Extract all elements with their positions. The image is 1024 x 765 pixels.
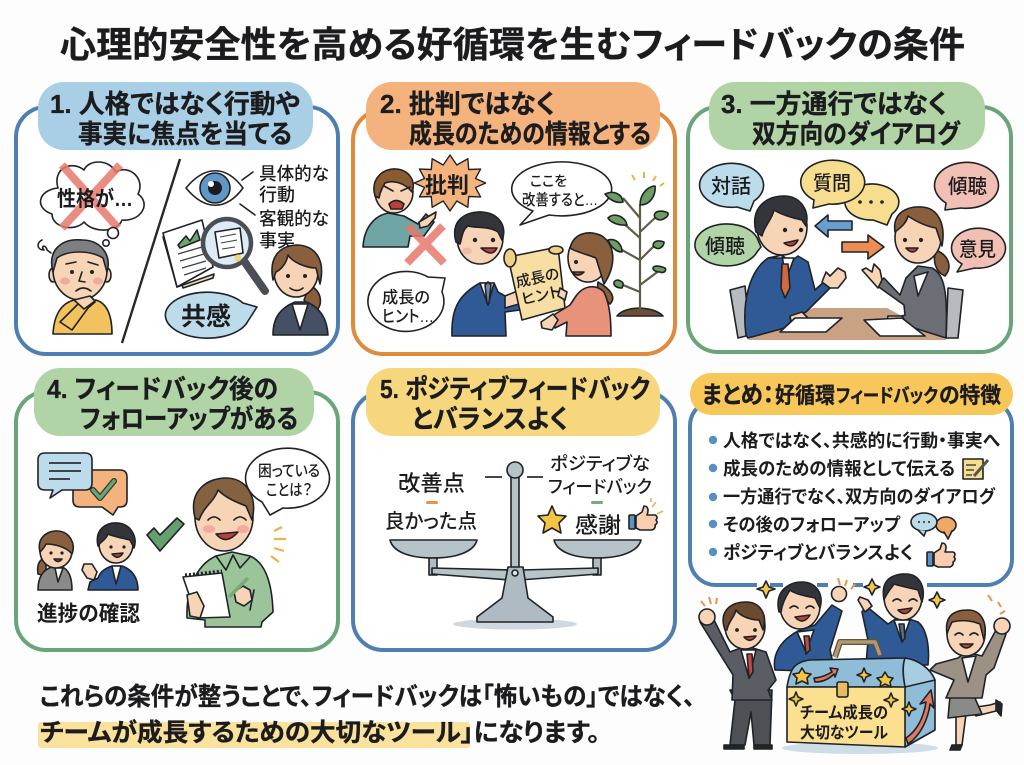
heading 5: とバランスよく (412, 404, 568, 434)
speech bubble: anything troubling (246, 448, 330, 515)
sparkles (757, 579, 945, 608)
worried older man (38, 240, 112, 334)
panel 3: two-way dialogue (688, 82, 1011, 352)
heading 1: 1. 人格ではなく行動や (50, 89, 300, 119)
angry critic (363, 169, 436, 247)
chest decorations (789, 668, 916, 716)
heading 4: 4. フィードバック後の (47, 374, 278, 404)
icon: note (963, 459, 988, 479)
balance labels right: 感謝 (575, 513, 621, 538)
woman in taupe suit (930, 610, 1010, 750)
panel 4: follow-up (16, 368, 338, 650)
divider slash (122, 159, 180, 343)
speech bubble: anything troubling: ことは？ (266, 482, 312, 499)
heading 5: 5. ポジティブフィードバック (380, 374, 650, 404)
arrow: blue pointing left (815, 215, 852, 237)
panel 5: positive balance (353, 368, 675, 650)
label: progress check: 進捗の確認 (37, 602, 140, 626)
balance labels left: 改善点 (398, 471, 465, 496)
smiling man with notepad (183, 478, 273, 627)
plant (605, 172, 668, 316)
bubble: opinion (951, 228, 1005, 272)
speech bubble: growth hint (368, 271, 445, 331)
thought cloud: personality crossed out (41, 162, 144, 246)
closing message: チームが成長するための大切なツール」になります。 (40, 718, 600, 747)
bubble: ellipsis (845, 184, 899, 225)
papers on table (780, 318, 925, 336)
labels: concrete behaviour, objective facts (259, 164, 329, 251)
icon: eye (186, 171, 255, 215)
blue chat bubble with lines (38, 453, 92, 498)
heading 3 (709, 82, 985, 150)
heading 3: 3. 一方通行ではなく (721, 89, 947, 119)
thought cloud: personality crossed out: 性格が… (57, 187, 133, 211)
balance labels left: 良かった点 (385, 510, 477, 533)
heading 4 (34, 368, 314, 436)
celebration rays (701, 578, 1005, 614)
icon: chat bubbles (911, 513, 956, 539)
heading 2: 成長のための情報とする (409, 119, 651, 149)
labels: concrete behaviour, objective facts: 事実 (259, 231, 295, 251)
bubble: listening pink (935, 162, 999, 210)
balance labels left (385, 471, 477, 533)
chairs and table (730, 286, 963, 340)
businessman offering scroll (452, 212, 522, 336)
summary list: 人格ではなく、共感的に行動・事実へ (723, 430, 1000, 451)
scroll: growth hint (504, 246, 565, 320)
speech bubble: if you improve here: ここを (530, 173, 567, 189)
summary list (709, 430, 1000, 563)
summary heading: 好循環 (775, 383, 835, 408)
scroll: growth hint: ヒント (520, 284, 563, 309)
closing message (38, 682, 695, 748)
icon: thumbs up (629, 506, 657, 530)
speech bubble: if you improve here (512, 162, 612, 225)
panel 2: growth information (353, 82, 675, 354)
man 1 gray suit (699, 602, 776, 749)
man 2 navy suit (774, 582, 846, 672)
scroll: growth hint: 成長の (514, 266, 561, 291)
bubble: dialogue: 対話 (711, 175, 751, 198)
summary list: 成長のための情報として伝える (723, 458, 955, 479)
panel: summary (690, 373, 1013, 588)
bubble: listening green (695, 224, 761, 266)
arrow: orange pointing right (842, 235, 884, 259)
listening woman (272, 245, 328, 335)
speech bubble: empathy: 共感 (181, 303, 231, 331)
summary list: その後のフォローアップ (723, 515, 901, 535)
balance scale (390, 462, 641, 630)
heading 5 (366, 368, 660, 436)
icon: star (538, 506, 566, 533)
labels: concrete behaviour, objective facts: 行動 (259, 185, 295, 205)
man 3 navy suit pointing (858, 574, 929, 665)
summary heading: の特徴 (939, 383, 1001, 408)
yellow accent rays (271, 527, 286, 562)
summary heading (690, 373, 1013, 415)
panel 1: behaviour and facts (16, 82, 338, 354)
team celebrating around the treasure chest (699, 574, 1010, 754)
orange chat bubble with check (73, 470, 127, 515)
bubble: dialogue (700, 163, 764, 211)
summary heading: フィードバック (836, 385, 938, 407)
burst: criticism (414, 155, 486, 211)
bubble: question (801, 160, 865, 208)
colleague man (82, 523, 138, 590)
thumb sparkle (651, 498, 663, 514)
colleague woman (38, 531, 73, 590)
businesswoman in dialogue (862, 207, 949, 338)
speech bubble: growth hint: ヒント… (382, 308, 434, 326)
heading 4: フォローアップがある (80, 404, 298, 434)
balance labels right (548, 453, 652, 538)
labels: concrete behaviour, objective facts: 具体的な (259, 164, 329, 184)
toolbox chest: 大切なツール (800, 724, 888, 742)
heading 2: 2. 批判ではなく (380, 89, 555, 119)
chest label: チーム成長の (800, 703, 888, 722)
icon: document and magnifier (163, 219, 265, 291)
toolbox chest (782, 642, 938, 754)
bubble: opinion: 意見 (959, 238, 996, 261)
heading 3: 双方向のダイアログ (752, 119, 961, 149)
balance labels right: フィードバック (548, 477, 652, 497)
bubble: question: 質問 (813, 172, 851, 195)
bubble: listening green: 傾聴 (705, 235, 745, 258)
heading 2 (366, 82, 660, 150)
speech bubble: growth hint: 成長の (382, 288, 430, 307)
title: 心理的安全性を高める好循環を生むフィードバックの条件 (60, 24, 965, 65)
heading 1 (38, 82, 313, 150)
bubble: listening pink: 傾聴 (948, 175, 987, 198)
closing message: これらの条件が整うことで、フィードバックは「怖いもの」ではなく、 (40, 682, 695, 711)
heading 1: 事実に焦点を当てる (78, 119, 292, 149)
speech bubble: anything troubling: 困っている (258, 463, 320, 480)
speech bubble: empathy (165, 292, 257, 338)
summary list: ポジティブとバランスよく (723, 542, 913, 563)
balance labels right: ポジティブな (550, 453, 650, 474)
icon: thumbs up small (927, 543, 955, 567)
woman receiving scroll (541, 233, 613, 336)
summary list: 一方通行でなく、双方向のダイアログ (723, 486, 996, 507)
businessman in dialogue (745, 196, 846, 338)
speech bubble: if you improve here: 改善すると… (522, 191, 598, 209)
burst: criticism: 批判 (425, 173, 469, 198)
labels: concrete behaviour, objective facts: 客観的な (259, 209, 329, 229)
icon: big check mark (147, 518, 184, 551)
summary heading: まとめ： (702, 382, 774, 409)
red cross over criticism (407, 226, 444, 263)
